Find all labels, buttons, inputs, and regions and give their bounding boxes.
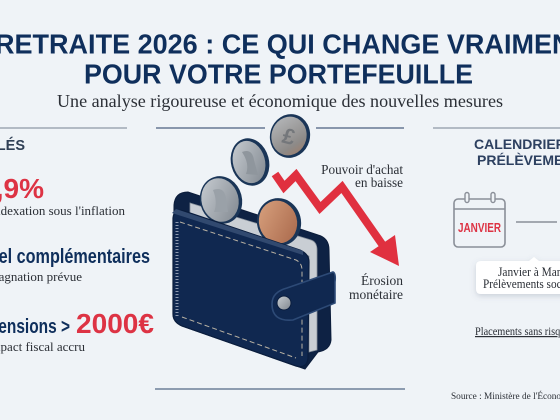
coin: pound: £ bbox=[280, 123, 299, 150]
icon: calendar bbox=[454, 192, 505, 247]
stat: complémentaires bbox=[0, 246, 150, 284]
label: érosion bbox=[349, 273, 403, 302]
coin: pound bbox=[265, 110, 315, 162]
wallet strap bbox=[272, 272, 335, 320]
panel heading bbox=[474, 136, 560, 168]
wallet back bbox=[173, 192, 331, 369]
label: érosion: monétaire bbox=[349, 287, 403, 302]
label: érosion: Érosion bbox=[361, 273, 403, 288]
panel: chiffres clés bbox=[0, 137, 154, 354]
title: POUR VOTRE PORTEFEUILLE bbox=[84, 58, 473, 90]
icon: calendar: JANVIER bbox=[458, 221, 501, 235]
stitching bbox=[180, 222, 302, 358]
wallet front bbox=[173, 210, 309, 367]
callout bbox=[476, 257, 560, 294]
coin: queen bbox=[225, 134, 275, 190]
label: pouvoir d'achat bbox=[321, 162, 403, 190]
stat: indexation bbox=[0, 173, 125, 218]
coin in wallet: silver bbox=[195, 171, 247, 229]
panel: calendrier bbox=[451, 136, 560, 402]
subtitle: Une analyse rigoureuse et économique des nouvelles mesures bbox=[57, 91, 503, 111]
strap button bbox=[277, 296, 291, 310]
title bbox=[0, 28, 560, 90]
illustration: wallet bbox=[172, 171, 335, 369]
inner cards bbox=[190, 203, 317, 352]
label: pouvoir d'achat: en baisse bbox=[355, 175, 403, 190]
coin in wallet: copper bbox=[252, 193, 306, 251]
stat: pensions bbox=[0, 308, 154, 354]
arrow: falling purchasing power bbox=[275, 174, 399, 266]
stat: pensions: 2000€ bbox=[76, 308, 154, 339]
label: pouvoir d'achat: Pouvoir d'achat bbox=[321, 162, 403, 177]
